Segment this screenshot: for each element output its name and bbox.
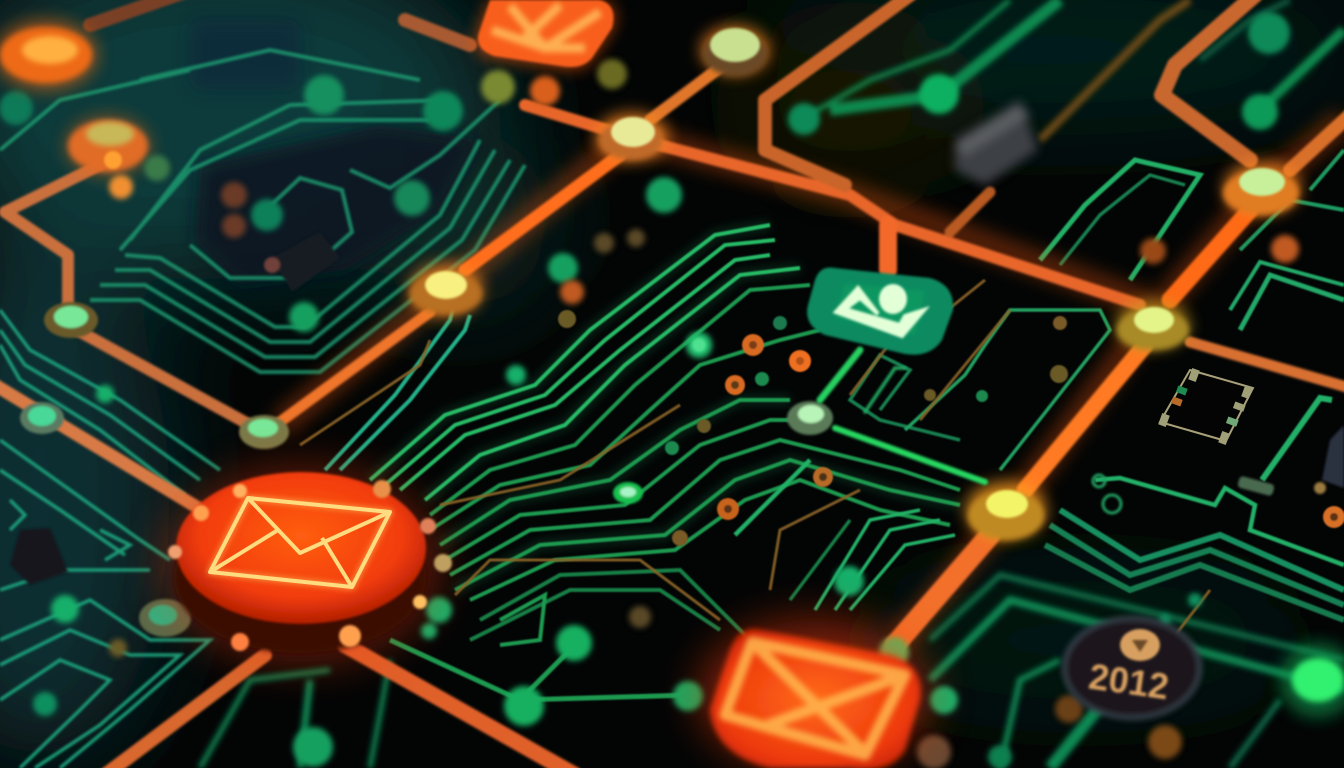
year label: 2012 xyxy=(1086,656,1171,707)
green traces: left lower nest xyxy=(0,310,220,768)
envelope: green badge xyxy=(807,268,953,355)
envelope: main, large red xyxy=(162,465,452,665)
green traces: top right xyxy=(800,0,1344,140)
small resistor xyxy=(1237,476,1275,496)
ring pads right xyxy=(1093,475,1121,513)
glowing green light: lower right xyxy=(1280,642,1344,718)
chip: square outline component xyxy=(1158,368,1253,445)
orange trace glow xyxy=(280,120,1344,640)
chip: right edge connector xyxy=(1314,425,1344,494)
envelope: top centre xyxy=(476,0,615,69)
gold traces xyxy=(300,280,1210,655)
chip: grey capacitor top xyxy=(955,100,1038,185)
envelope: lower centre xyxy=(700,620,930,768)
green traces: upper left nest xyxy=(0,50,525,372)
envelope: top left xyxy=(0,19,98,91)
green traces: bottom xyxy=(200,575,1344,768)
badge: 2012 chip xyxy=(1064,618,1200,718)
chip: dark component upper left xyxy=(264,232,340,292)
envelope: upper left small xyxy=(64,114,170,199)
green traces: centre right xyxy=(735,150,1344,620)
green traces: centre bus glow xyxy=(370,225,960,590)
chip: dark component left xyxy=(10,528,68,585)
bright green connector xyxy=(820,350,985,482)
glowing junction nodes xyxy=(20,26,1300,637)
green traces: centre bus xyxy=(325,225,960,700)
